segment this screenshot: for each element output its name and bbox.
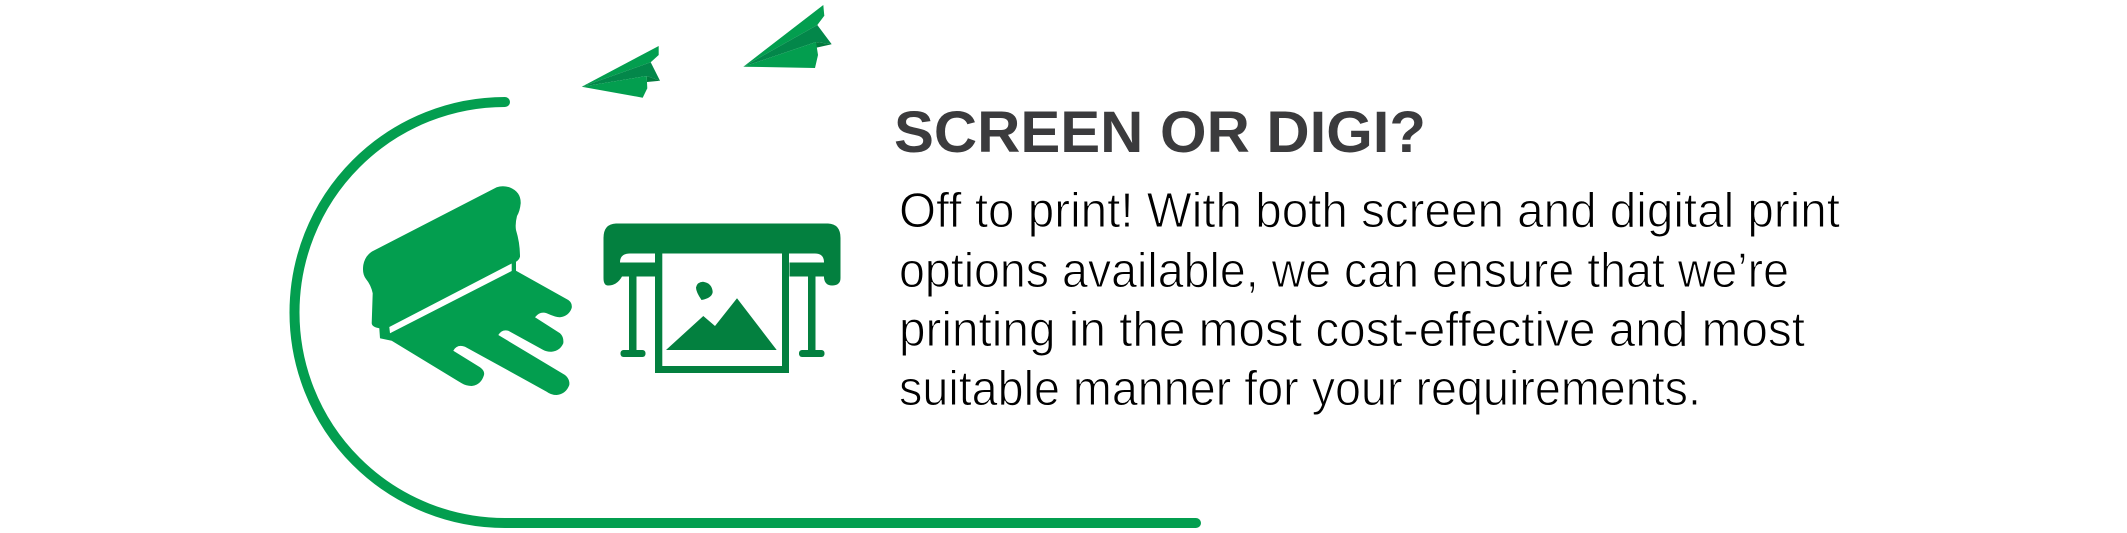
body text: printing in the most cost-effective and most: [899, 303, 1805, 357]
body text: Off to print! With both screen and digital print: [899, 184, 1840, 238]
body text: options available, we can ensure that we’re: [899, 244, 1789, 298]
icon: wide-format printer: [604, 224, 840, 373]
body text: suitable manner for your requirements.: [899, 362, 1701, 416]
icon: squeegee: [363, 186, 572, 395]
title: SCREEN OR DIGI?: [894, 100, 1426, 165]
icon: paper plane large: [743, 5, 832, 68]
icon: paper plane small: [582, 46, 660, 98]
curved track arrow line: [295, 102, 1196, 523]
body text: [899, 184, 1840, 416]
